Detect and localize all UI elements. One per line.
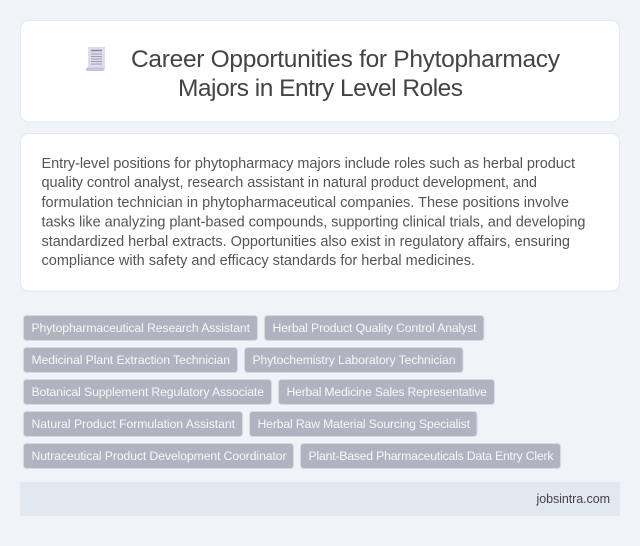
description text: standardized herbal extracts. Opportunities also exist in regulatory affairs, ensuring (42, 234, 570, 250)
tag: Natural Product Formulation Assistant: Natural Product Formulation Assistant (32, 417, 236, 431)
tag: Phytopharmaceutical Research Assistant: Phytopharmaceutical Research Assistant (32, 321, 251, 335)
description text: formulation technician in phytopharmaceutical companies. These positions involve (42, 195, 569, 211)
tag: Botanical Supplement Regulatory Associate: Botanical Supplement Regulatory Associate (32, 385, 264, 399)
tag: Herbal Medicine Sales Representative (278, 380, 494, 404)
footer source text: jobsintra.com (536, 492, 610, 506)
description text (42, 156, 586, 269)
tag: Nutraceutical Product Development Coordinator: Nutraceutical Product Development Coordinator (32, 449, 286, 463)
tag: Phytopharmaceutical Research Assistant (24, 316, 258, 340)
description panel (20, 134, 620, 291)
tag list (24, 316, 560, 468)
footer bar (20, 482, 620, 516)
description text: Entry-level positions for phytopharmacy majors include roles such as herbal product (42, 156, 575, 172)
title: Career Opportunities for Phytopharmacy (131, 46, 561, 73)
description text: compliance with safety and efficacy standards for herbal medicines. (42, 253, 475, 269)
tag: Phytochemistry Laboratory Technician (244, 348, 463, 372)
tag: Herbal Product Quality Control Analyst: Herbal Product Quality Control Analyst (272, 321, 477, 335)
tag: Nutraceutical Product Development Coordinator (24, 444, 294, 468)
description text: quality control analyst, research assistant in natural product development, and (42, 175, 537, 191)
title (131, 46, 561, 102)
title: Majors in Entry Level Roles (178, 75, 463, 102)
icon: paper scroll (86, 47, 105, 71)
tag: Medicinal Plant Extraction Technician: Medicinal Plant Extraction Technician (32, 353, 230, 367)
tag: Medicinal Plant Extraction Technician (24, 348, 238, 372)
tag: Herbal Raw Material Sourcing Specialist (250, 412, 477, 436)
header panel (20, 20, 620, 122)
tag: Plant-Based Pharmaceuticals Data Entry Clerk: Plant-Based Pharmaceuticals Data Entry Clerk (308, 449, 554, 463)
tag: Plant-Based Pharmaceuticals Data Entry Clerk (300, 444, 560, 468)
tag: Phytochemistry Laboratory Technician: Phytochemistry Laboratory Technician (252, 353, 456, 367)
tag: Botanical Supplement Regulatory Associate (24, 380, 272, 404)
tag: Herbal Product Quality Control Analyst (264, 316, 484, 340)
tag: Natural Product Formulation Assistant (24, 412, 242, 436)
tag: Herbal Medicine Sales Representative: Herbal Medicine Sales Representative (286, 385, 487, 399)
tag: Herbal Raw Material Sourcing Specialist: Herbal Raw Material Sourcing Specialist (258, 417, 471, 431)
description text: tasks like analyzing plant-based compounds, supporting clinical trials, and developing (42, 214, 586, 230)
